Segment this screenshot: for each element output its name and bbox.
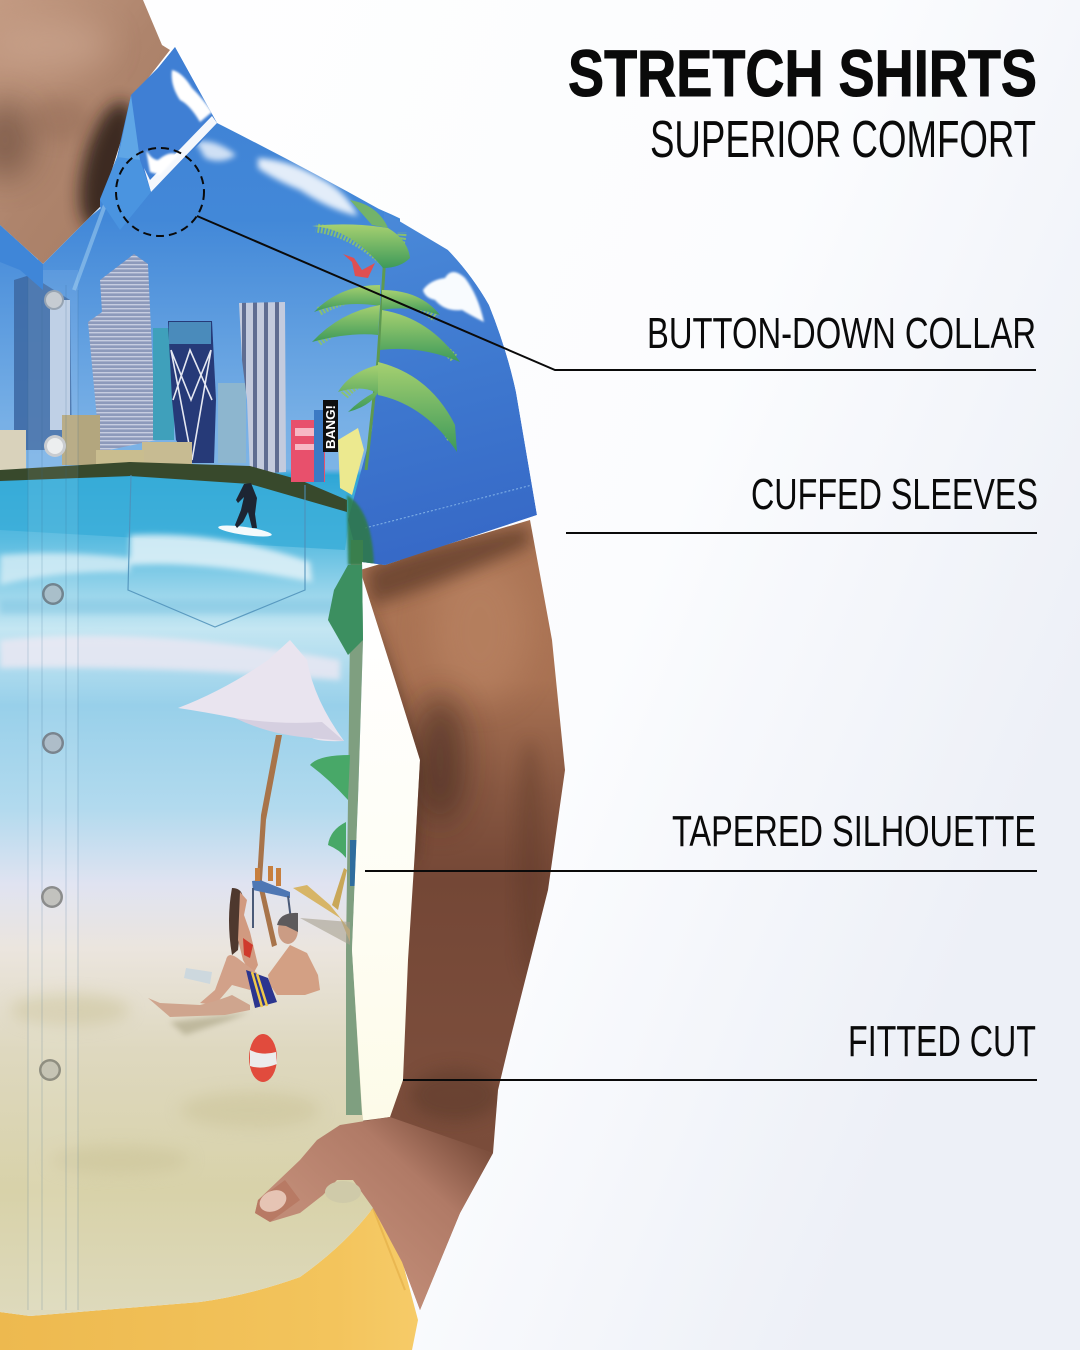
button placket [28, 205, 105, 1310]
skyline [0, 254, 364, 512]
man torso [268, 945, 320, 995]
shirt [0, 40, 537, 1320]
woman bent leg [200, 955, 257, 1005]
sleeve cuff stitch [365, 485, 532, 528]
leader line: cuffed sleeves [566, 532, 1037, 534]
low rise buildings [0, 415, 192, 475]
leader line: tapered silhouette [365, 870, 1037, 872]
shorts [0, 1208, 418, 1350]
palm tree [312, 200, 460, 470]
BANG sign: BANG! [323, 405, 338, 449]
twisted white tower [239, 302, 286, 474]
leader line: button-down collar [197, 216, 1036, 370]
button [42, 583, 64, 605]
curved glass tower [88, 254, 156, 452]
gap between arm and shirt [345, 620, 435, 1130]
neck and chest skin [0, 0, 170, 264]
tree line [0, 462, 347, 512]
beach ball [249, 1034, 277, 1082]
annotation: dashed collar circle [116, 148, 204, 236]
pale tower [218, 383, 246, 463]
bikini [243, 938, 253, 958]
bare arm [362, 520, 565, 1310]
dark faceted tower [168, 321, 216, 463]
shirt body print gradient [0, 40, 400, 1320]
flamingo [343, 254, 375, 278]
button [41, 886, 63, 908]
flip flops [184, 968, 212, 984]
surfer [218, 483, 272, 539]
woman torso [238, 892, 258, 976]
sand blotches [10, 994, 320, 1174]
buttons [39, 290, 66, 1081]
man head [278, 925, 298, 944]
clouds [196, 141, 358, 216]
sleeve [348, 212, 537, 568]
rainbow swim shorts [246, 970, 277, 1008]
button [44, 435, 66, 457]
sleeve cloud [423, 272, 484, 322]
lounge chair and table [252, 866, 350, 945]
pink hotel [291, 410, 325, 482]
couple on the beach [148, 888, 320, 1035]
button [44, 290, 64, 310]
shirt pocket [128, 475, 305, 627]
side seam palms [310, 495, 374, 1115]
shirt fold under thumb [325, 1181, 361, 1203]
surf bands [0, 534, 340, 680]
thumbnail [256, 1186, 290, 1216]
woman hair [229, 888, 243, 955]
yellow hotel [338, 428, 364, 495]
button [42, 732, 64, 754]
leader line: fitted cut [403, 1079, 1037, 1081]
hand in pocket [255, 1117, 493, 1310]
collar [0, 47, 217, 290]
umbrella [178, 640, 344, 947]
button [39, 1059, 61, 1081]
woman straight leg [148, 995, 250, 1017]
left tower [14, 275, 72, 450]
teal tower [153, 328, 174, 440]
shoreline water edge [0, 506, 348, 550]
